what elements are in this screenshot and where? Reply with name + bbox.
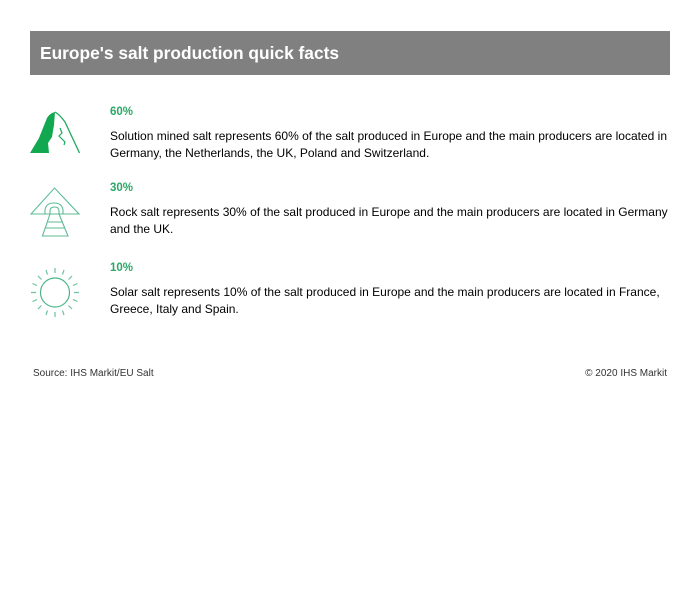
title: Europe's salt production quick facts [40, 43, 339, 63]
description: Solution mined salt represents 60% of the salt produced in Europe and the main producers are located in [110, 129, 667, 143]
fact: rock salt [30, 182, 668, 236]
copyright note: © 2020 IHS Markit [585, 368, 667, 379]
fact: solution mined salt [30, 106, 667, 160]
icon: sun [31, 268, 79, 317]
description: Rock salt represents 30% of the salt produced in Europe and the main producers are located in Germany [110, 205, 668, 219]
source note: Source: IHS Markit/EU Salt [33, 368, 154, 379]
description: Greece, Italy and Spain. [110, 302, 239, 316]
description [110, 129, 667, 160]
percentage: 60% [110, 106, 133, 118]
percentage: 10% [110, 262, 133, 274]
description [110, 205, 668, 236]
percentage: 30% [110, 182, 133, 194]
description: Germany, the Netherlands, the UK, Poland and Switzerland. [110, 146, 429, 160]
title banner [30, 31, 670, 75]
icon: mine tunnel [30, 187, 80, 236]
icon: mountain [30, 112, 80, 154]
description: and the UK. [110, 222, 173, 236]
fact: solar salt [31, 262, 660, 317]
description [110, 285, 660, 316]
description: Solar salt represents 10% of the salt produced in Europe and the main producers are located in France, [110, 285, 660, 299]
